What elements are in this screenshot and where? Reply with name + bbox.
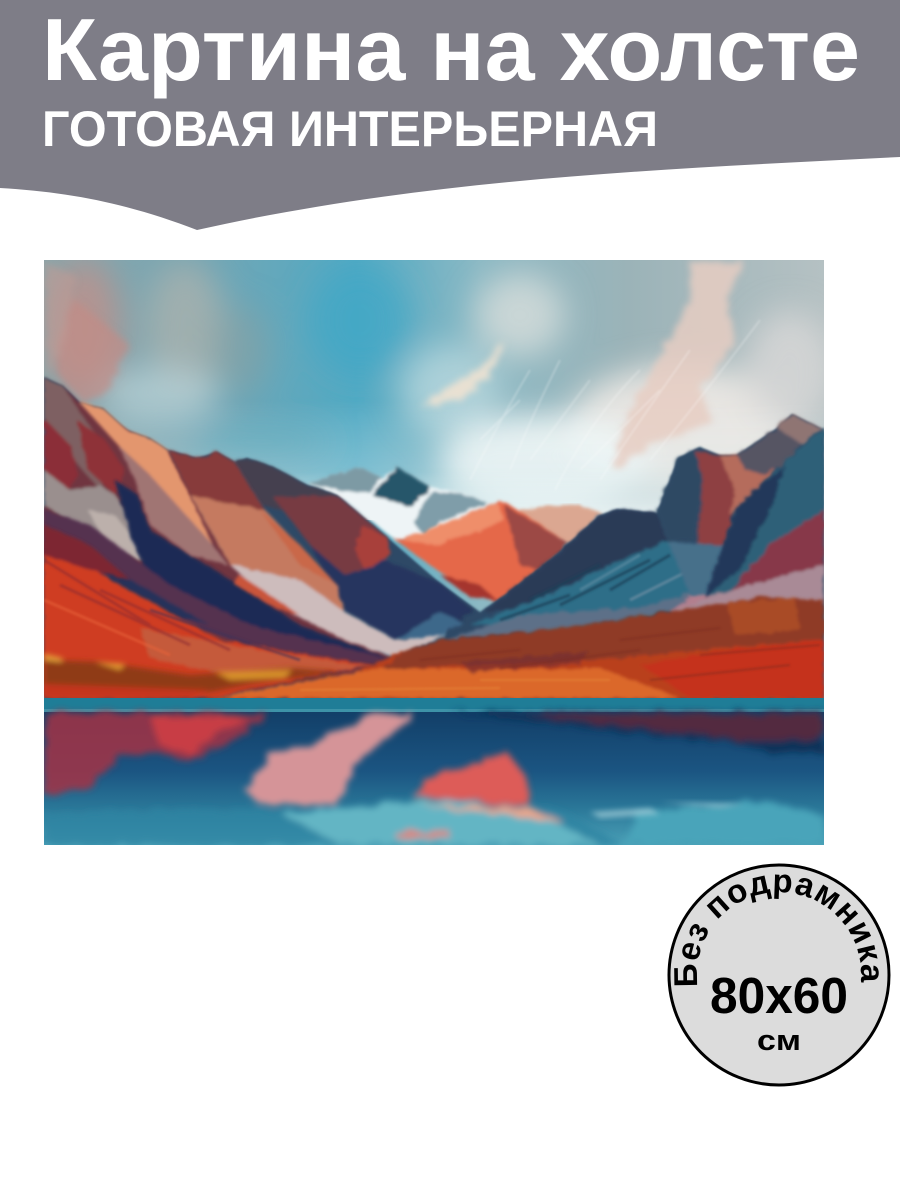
title: Картина на холсте <box>42 0 860 99</box>
autumn trees <box>44 654 340 698</box>
left of valley navy <box>410 604 472 646</box>
right slopes <box>447 509 730 640</box>
plain brush streaks <box>301 644 820 691</box>
water highlights <box>590 802 745 818</box>
curved label: Без подрамника <box>674 874 879 986</box>
lake reflection <box>44 712 824 845</box>
snow-capped peak <box>308 467 488 540</box>
mountain base mass <box>44 377 824 700</box>
far pink peak <box>510 505 602 545</box>
right teal ridge <box>670 428 824 622</box>
right rock face <box>657 414 822 595</box>
central red-brown mountain <box>168 450 445 658</box>
left massif <box>44 377 395 698</box>
teal shoreline water <box>44 698 824 713</box>
right slope brush streaks <box>500 555 690 620</box>
foreground orange plain <box>200 597 824 700</box>
sky <box>44 260 835 700</box>
navy diagonal streaks <box>44 480 393 668</box>
left background ridge <box>235 458 470 640</box>
canvas painting: mountain lake <box>44 260 835 845</box>
orange sunlit ridge <box>80 403 228 565</box>
header banner <box>0 0 900 230</box>
orange central peak <box>394 501 568 603</box>
unit: см <box>757 1025 801 1057</box>
subtitle: ГОТОВАЯ ИНТЕРЬЕРНАЯ <box>42 101 658 157</box>
size: 80x60 <box>710 967 848 1024</box>
red slope brush streaks <box>44 560 300 660</box>
red slope <box>44 525 375 698</box>
size badge <box>668 864 890 1086</box>
